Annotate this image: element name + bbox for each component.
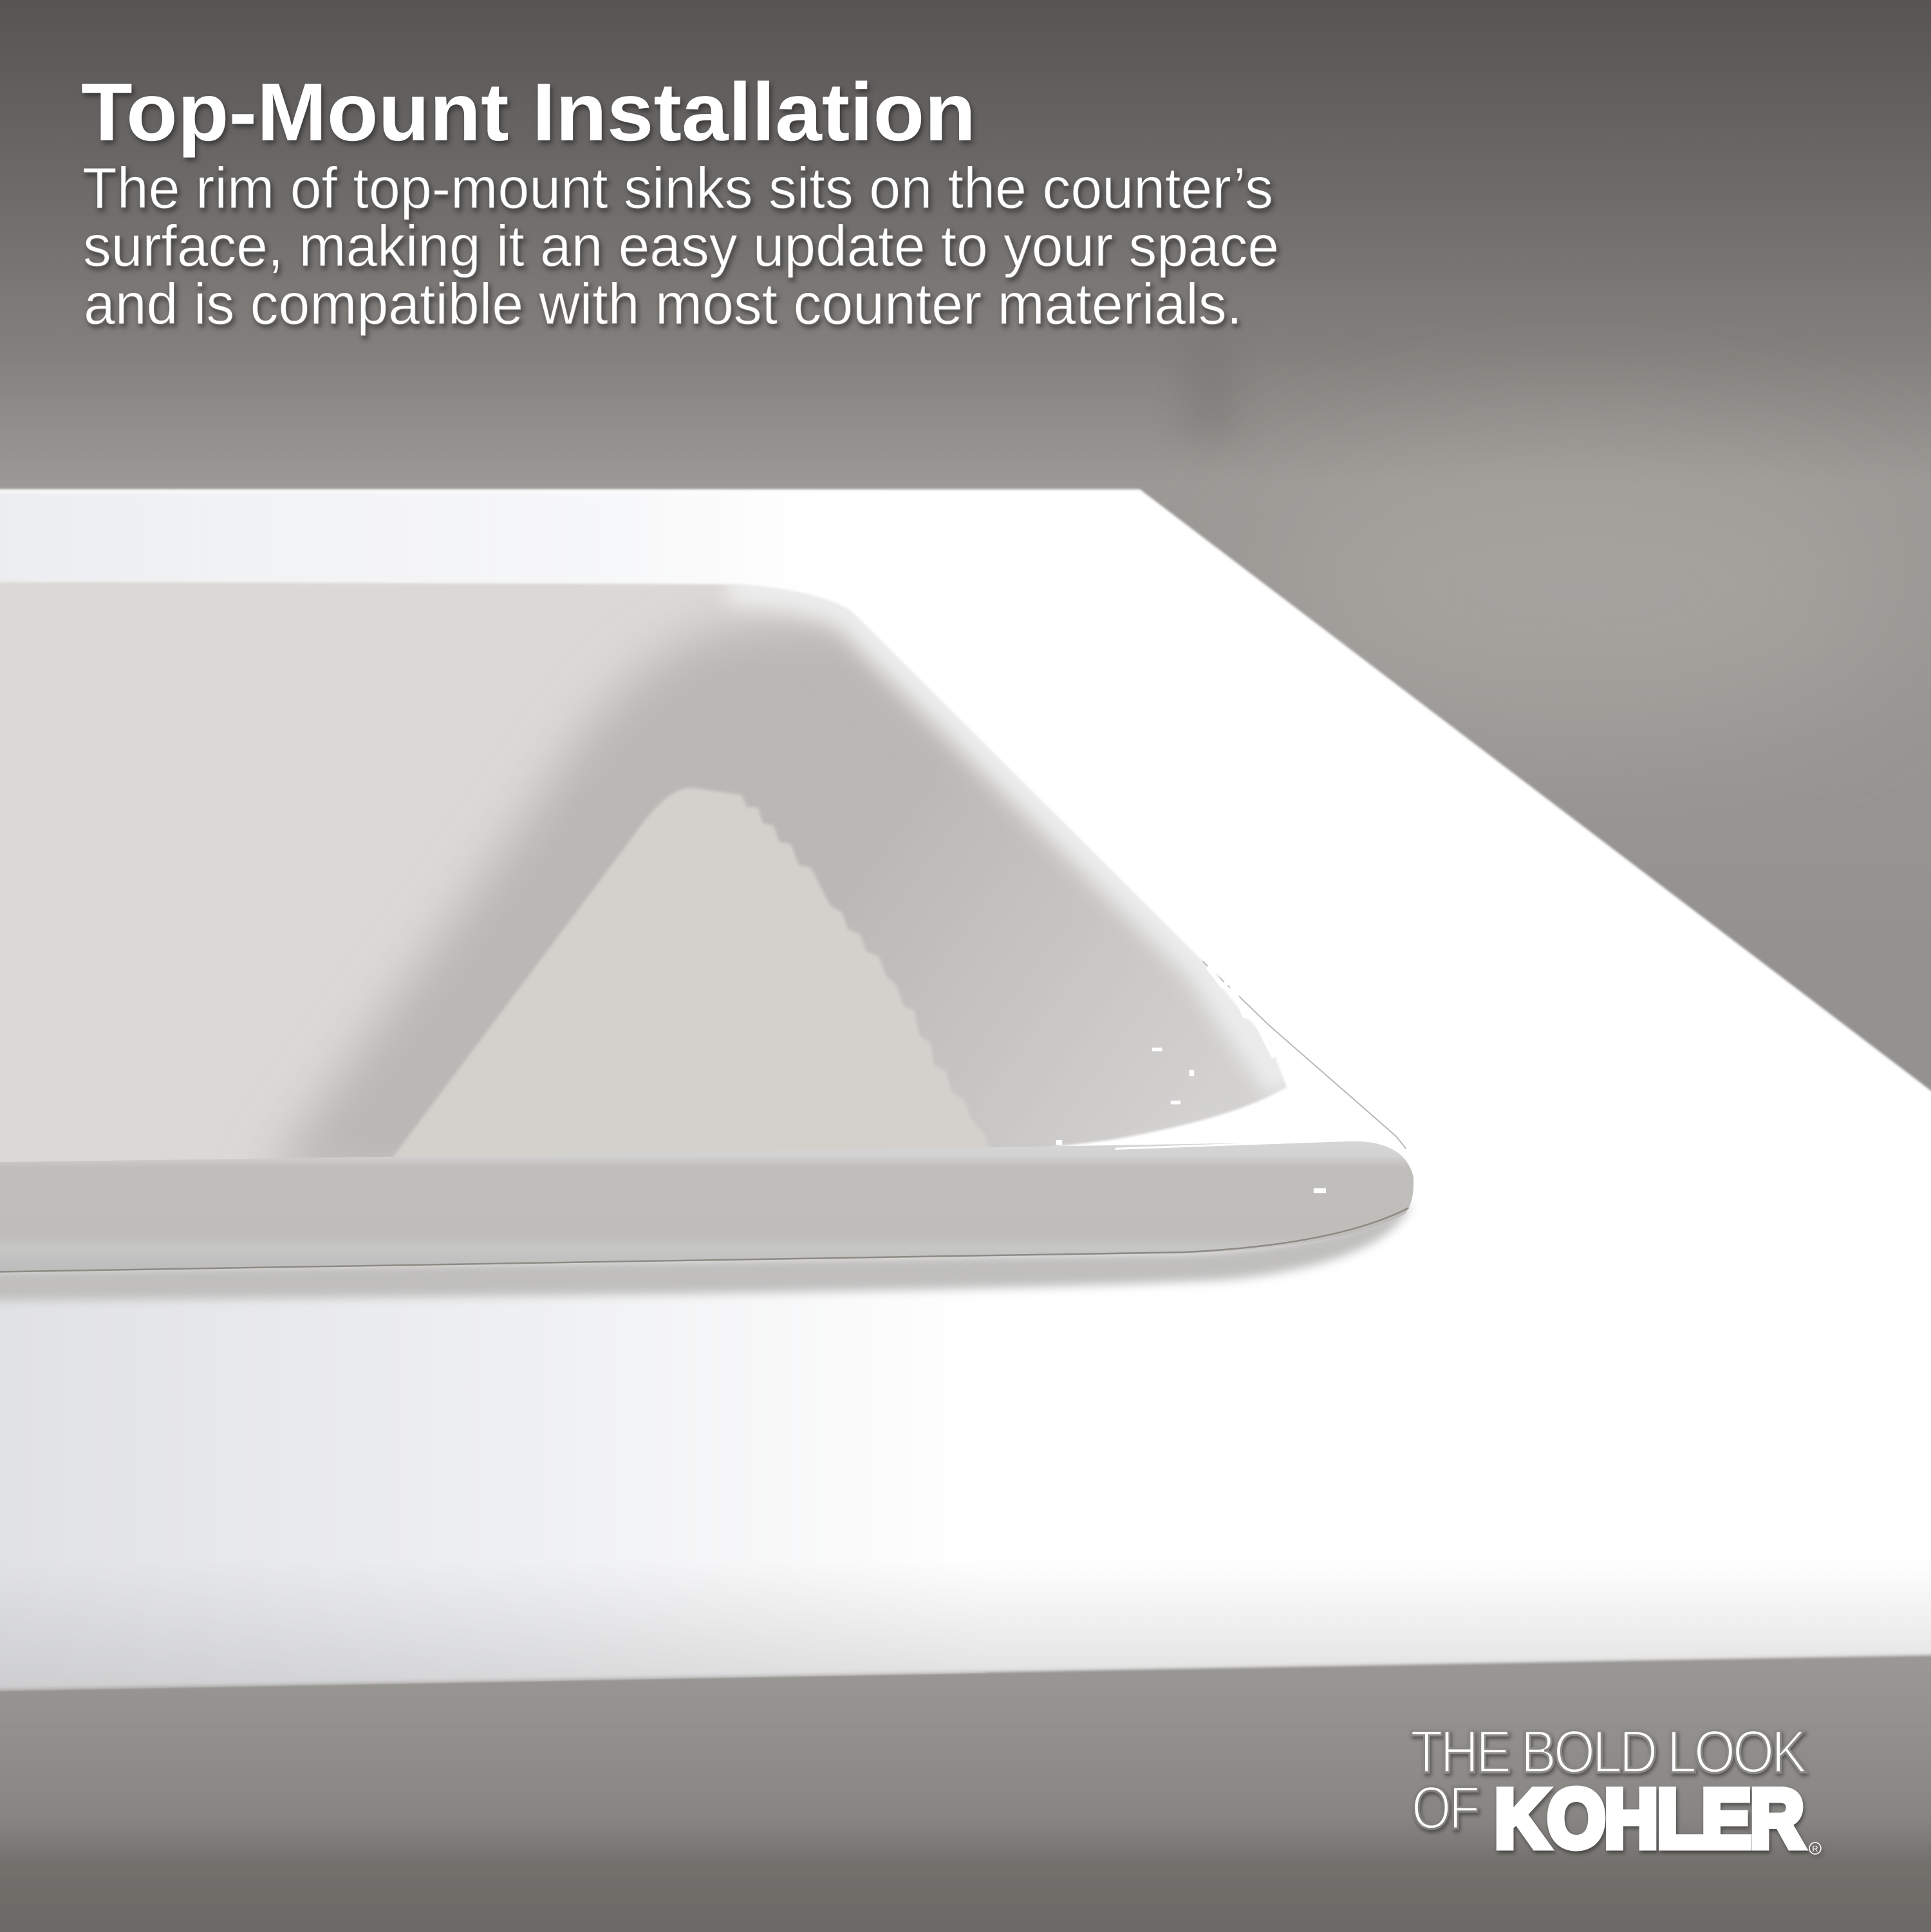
description xyxy=(82,156,1279,337)
title: Top-Mount Installation xyxy=(81,66,976,158)
heading text block xyxy=(81,66,1279,337)
counter surface xyxy=(0,489,1931,1701)
tagline line one: THE BOLD LOOK xyxy=(1410,1718,1807,1785)
back wall of basin xyxy=(0,581,842,1163)
lit basin floor with serrated shadow edge xyxy=(392,787,992,1159)
description: The rim of top-mount sinks sits on the counter’s xyxy=(82,156,1273,221)
glints xyxy=(1056,1047,1326,1193)
soft top edge xyxy=(0,579,727,582)
sink basin xyxy=(0,573,1413,1300)
white glaze along basin edge xyxy=(1208,966,1274,1058)
description: surface, making it an easy update to your space xyxy=(83,214,1279,279)
description: and is compatible with most counter materials. xyxy=(84,272,1242,337)
sink front lip xyxy=(0,1141,1413,1272)
logo: The Bold Look of Kohler xyxy=(1410,1718,1821,1865)
registered mark: R xyxy=(1812,1844,1818,1853)
tagline OF: OF xyxy=(1412,1774,1478,1841)
floor band beneath the counter xyxy=(0,1655,1931,1932)
wordmark KOHLER: KOHLER xyxy=(1495,1773,1803,1865)
shadow band and right wall xyxy=(270,613,1184,1158)
sink front lip shadow on counter xyxy=(0,1203,1412,1300)
registered mark xyxy=(1809,1843,1821,1854)
lighter lower part of right wall xyxy=(913,847,1269,1147)
outer rim hairline xyxy=(1203,961,1406,1149)
soft light along the outer basin edge xyxy=(727,584,1287,1087)
basin interior xyxy=(0,573,1343,1183)
